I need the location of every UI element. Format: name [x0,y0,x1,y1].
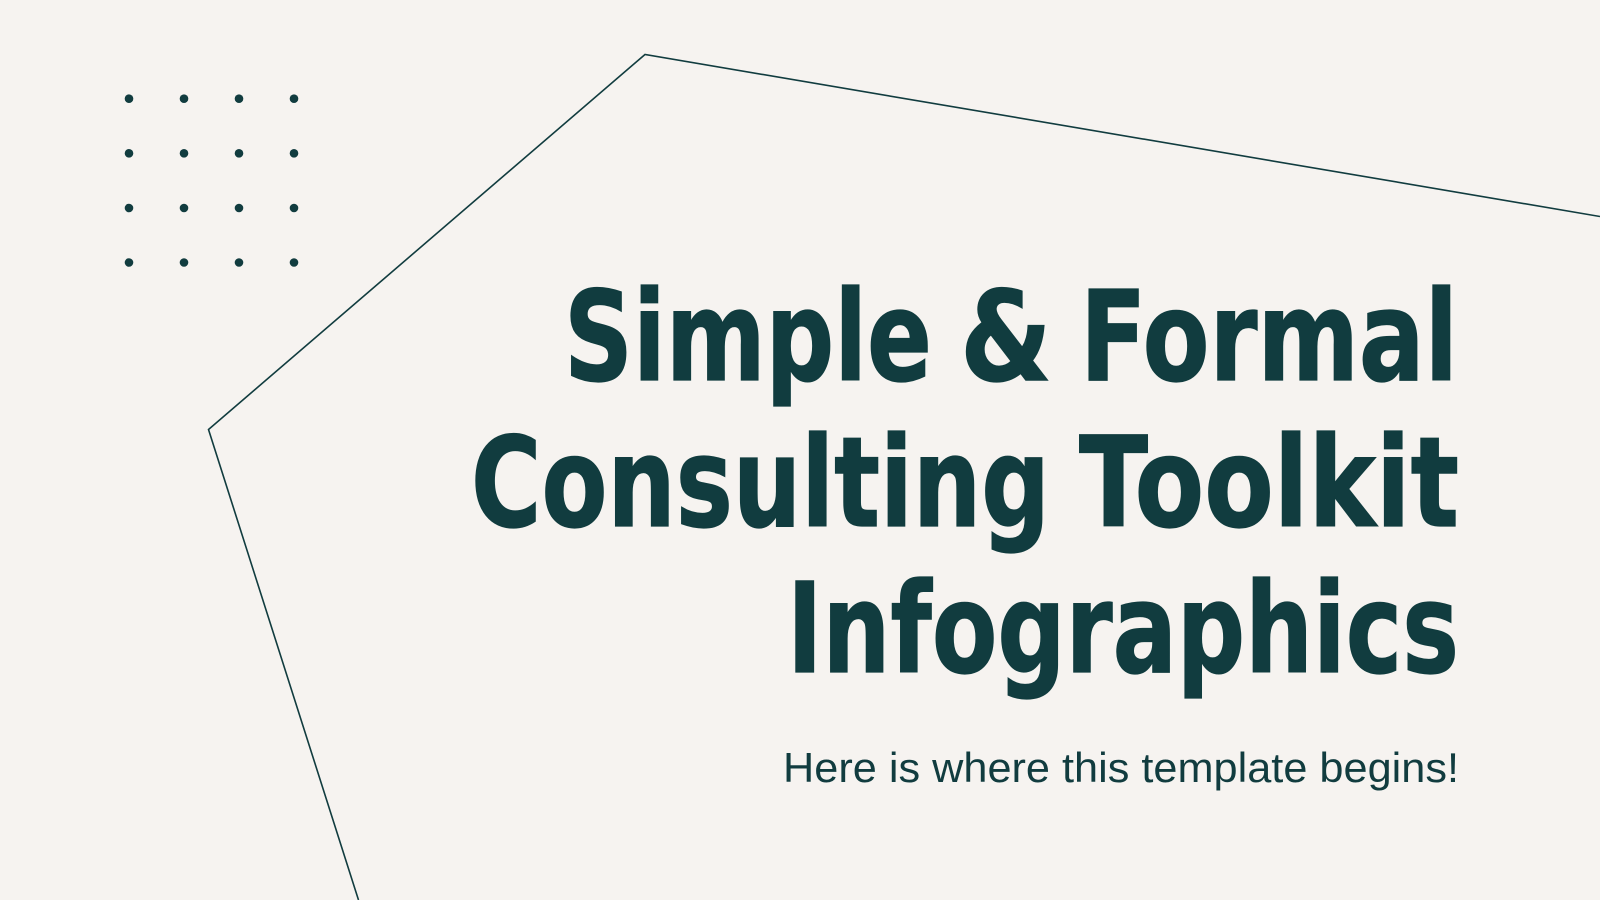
title [471,265,1459,702]
title line 1: Simple [564,265,932,410]
title line 1: Formal [1080,265,1458,410]
title line 1 [564,265,1458,410]
dot grid [125,94,298,267]
subtitle: Here is where this template begins! [783,744,1459,791]
title line 2: Consulting [471,411,1050,556]
title line 1: & [960,265,1052,410]
title line 2: Toolkit [1079,411,1459,556]
